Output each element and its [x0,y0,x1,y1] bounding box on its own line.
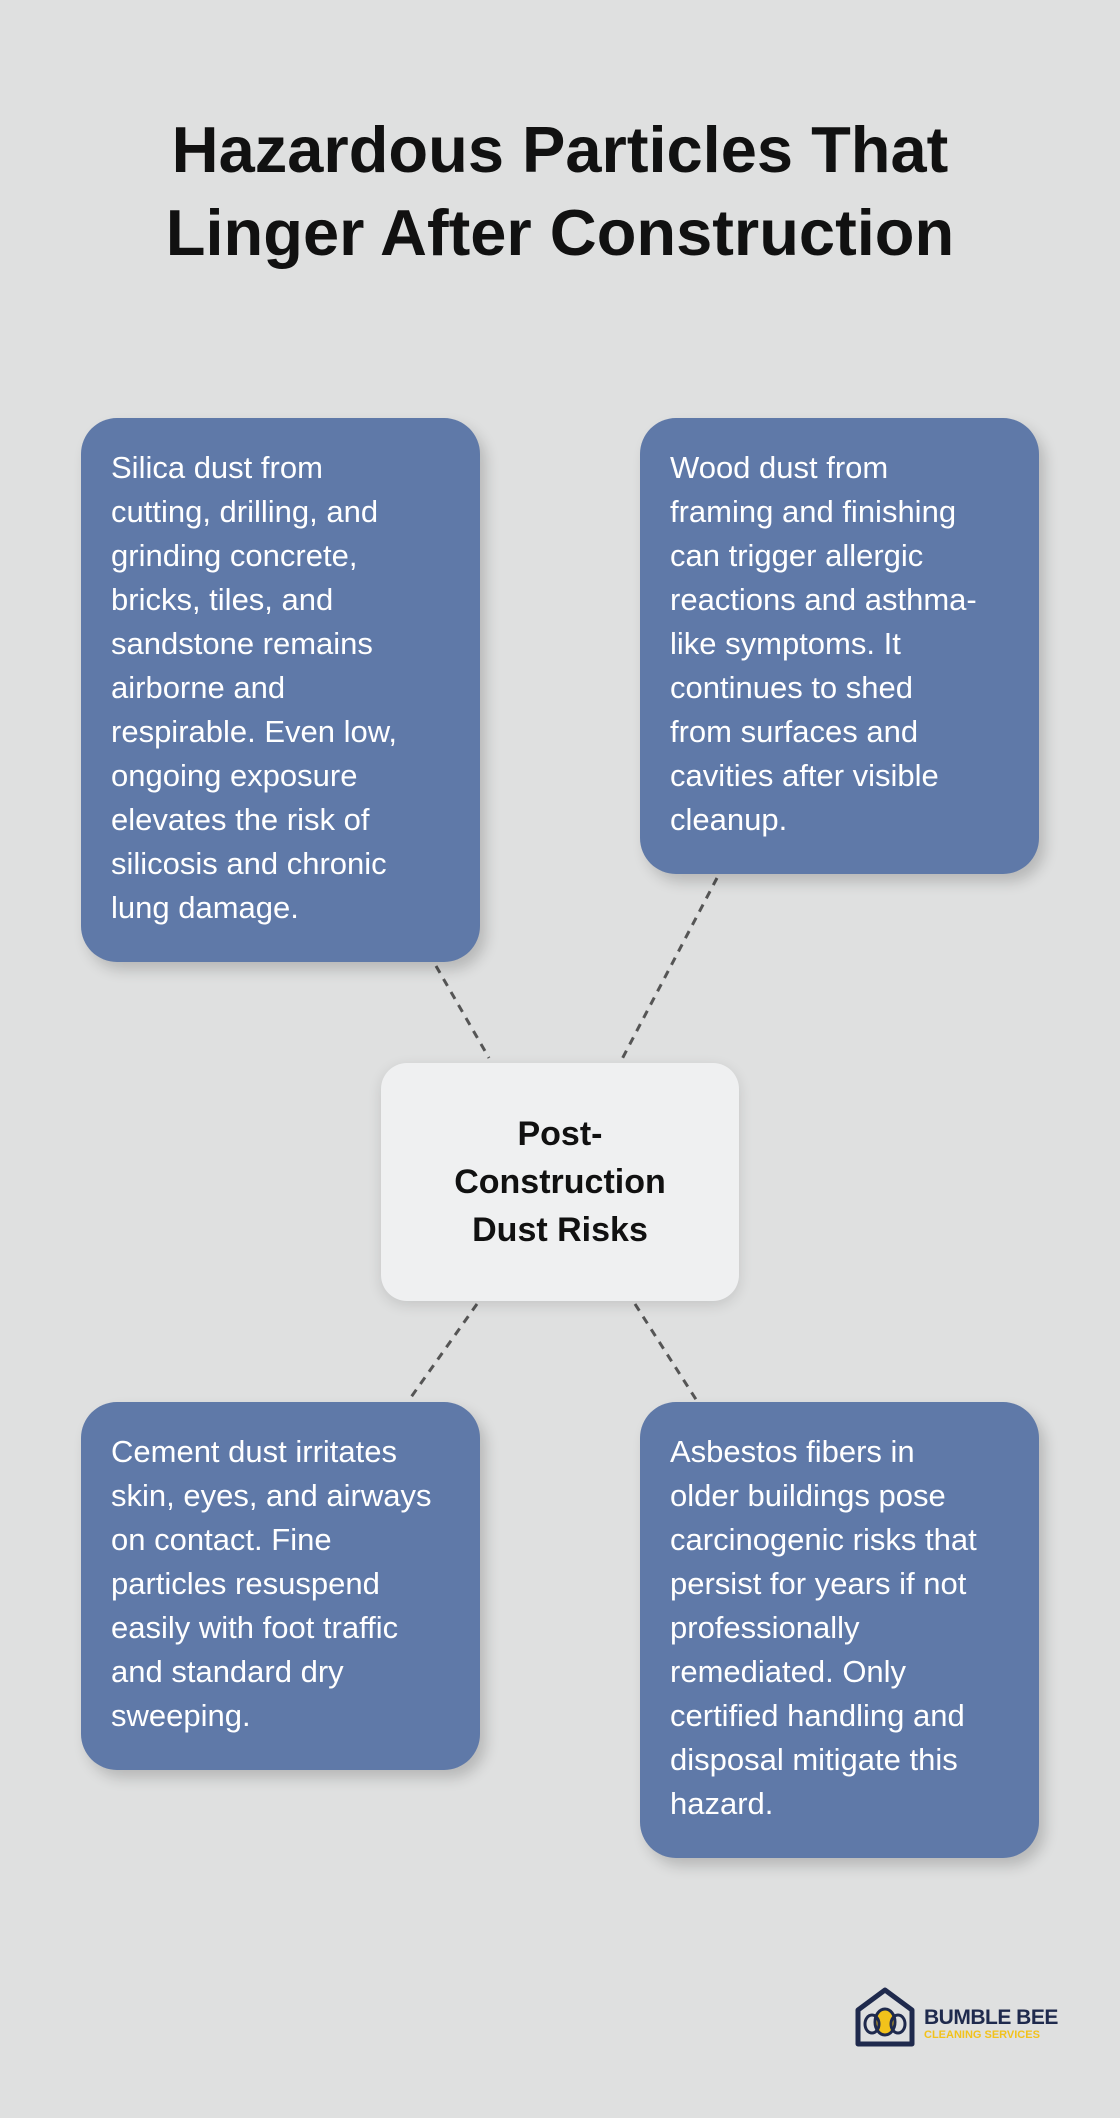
card: cement: particles resuspend [111,1566,380,1601]
card: asbestos: carcinogenic risks that [670,1522,977,1557]
card: cement: skin, eyes, and airways [111,1478,431,1513]
logo: CLEANING SERVICES [924,2029,1040,2041]
card: silica: ongoing exposure [111,758,357,793]
card: wood: continues to shed [670,670,913,705]
card: silica [81,418,480,962]
card: asbestos: disposal mitigate this [670,1742,958,1777]
card: silica: lung damage. [111,890,299,925]
title [166,113,954,269]
card: cement: on contact. Fine [111,1522,332,1557]
card: wood: like symptoms. It [670,626,901,661]
card: asbestos: certified handling and [670,1698,965,1733]
card: asbestos: Asbestos fibers in [670,1434,915,1469]
logo [856,1988,1058,2046]
card: wood: cavities after visible [670,758,939,793]
icon: bee house [856,1988,914,2046]
card: wood: framing and finishing [670,494,956,529]
card: asbestos: persist for years if not [670,1566,966,1601]
card: asbestos: hazard. [670,1786,773,1821]
card: cement: sweeping. [111,1698,251,1733]
logo: BUMBLE BEE [924,2006,1058,2029]
card: wood: reactions and asthma- [670,582,977,617]
card: silica: bricks, tiles, and [111,582,333,617]
card: silica: cutting, drilling, and [111,494,378,529]
card: silica: sandstone remains [111,626,373,661]
card: wood: can trigger allergic [670,538,923,573]
title: Hazardous Particles That [172,113,948,186]
card: wood: cleanup. [670,802,787,837]
card: asbestos: remediated. Only [670,1654,906,1689]
card: silica: airborne and [111,670,285,705]
card: silica: silicosis and chronic [111,846,387,881]
card: silica: grinding concrete, [111,538,357,573]
card: cement [81,1402,480,1770]
center node: Construction [454,1163,666,1201]
center node [381,1063,739,1301]
card: wood: Wood dust from [670,450,888,485]
card: asbestos: professionally [670,1610,860,1645]
card: silica: elevates the risk of [111,802,369,837]
card: silica: respirable. Even low, [111,714,397,749]
center node: Dust Risks [472,1211,648,1249]
center node: Post- [517,1115,602,1153]
card: cement: and standard dry [111,1654,344,1689]
card: cement: Cement dust irritates [111,1434,397,1469]
card: cement: easily with foot traffic [111,1610,398,1645]
card: asbestos: older buildings pose [670,1478,946,1513]
title: Linger After Construction [166,196,954,269]
card: asbestos [640,1402,1039,1858]
card: silica: Silica dust from [111,450,323,485]
card: wood [640,418,1039,874]
card: wood: from surfaces and [670,714,918,749]
